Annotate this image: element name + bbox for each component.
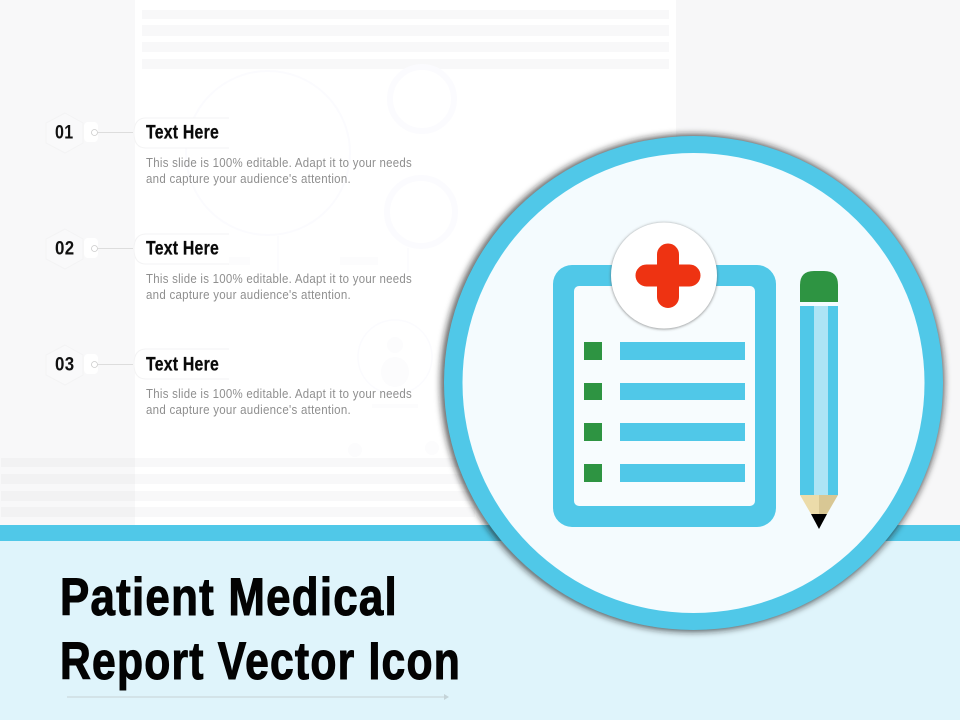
- connector 03: [92, 362, 133, 368]
- title: Patient Medical: [60, 568, 398, 627]
- description 03: and capture your audience's attention.: [146, 402, 351, 417]
- description 02: [146, 271, 412, 302]
- connector 02: [92, 246, 133, 252]
- title underline arrow: [67, 694, 449, 700]
- connector 01: [92, 130, 133, 136]
- heading 02: [134, 234, 229, 264]
- number badge 02: 02: [55, 238, 74, 260]
- badge ring: [444, 136, 943, 630]
- title: Report Vector Icon: [60, 632, 461, 691]
- item 01: [46, 113, 412, 186]
- item 03: [46, 345, 412, 417]
- faded background slide: [0, 0, 960, 525]
- pencil: [800, 271, 838, 529]
- checklist rows: [584, 342, 745, 482]
- heading 03: Text Here: [146, 354, 219, 376]
- description 03: This slide is 100% editable. Adapt it to your needs: [146, 386, 412, 401]
- description 02: This slide is 100% editable. Adapt it to your needs: [146, 271, 412, 286]
- description 01: and capture your audience's attention.: [146, 171, 351, 186]
- number badge 02: [46, 229, 98, 269]
- medical icon badge: [440, 134, 944, 632]
- badge inner circle: [462, 153, 924, 613]
- heading 02: Text Here: [146, 238, 219, 260]
- clipboard: [553, 222, 776, 527]
- number badge 03: 03: [55, 354, 74, 376]
- heading 03: [134, 349, 229, 379]
- title: [60, 568, 461, 691]
- number badge 01: 01: [55, 122, 74, 144]
- description 02: and capture your audience's attention.: [146, 287, 351, 302]
- heading 01: Text Here: [146, 122, 219, 144]
- medical cross seal: [610, 222, 718, 330]
- description 01: This slide is 100% editable. Adapt it to your needs: [146, 155, 412, 170]
- bottom title band: [0, 525, 960, 720]
- heading 01: [134, 118, 229, 148]
- number badge 03: [46, 345, 98, 385]
- number badge 01: [46, 113, 98, 153]
- description 01: [146, 155, 412, 186]
- badge shadow: [440, 134, 944, 632]
- description 03: [146, 386, 412, 417]
- item 02: [46, 229, 412, 302]
